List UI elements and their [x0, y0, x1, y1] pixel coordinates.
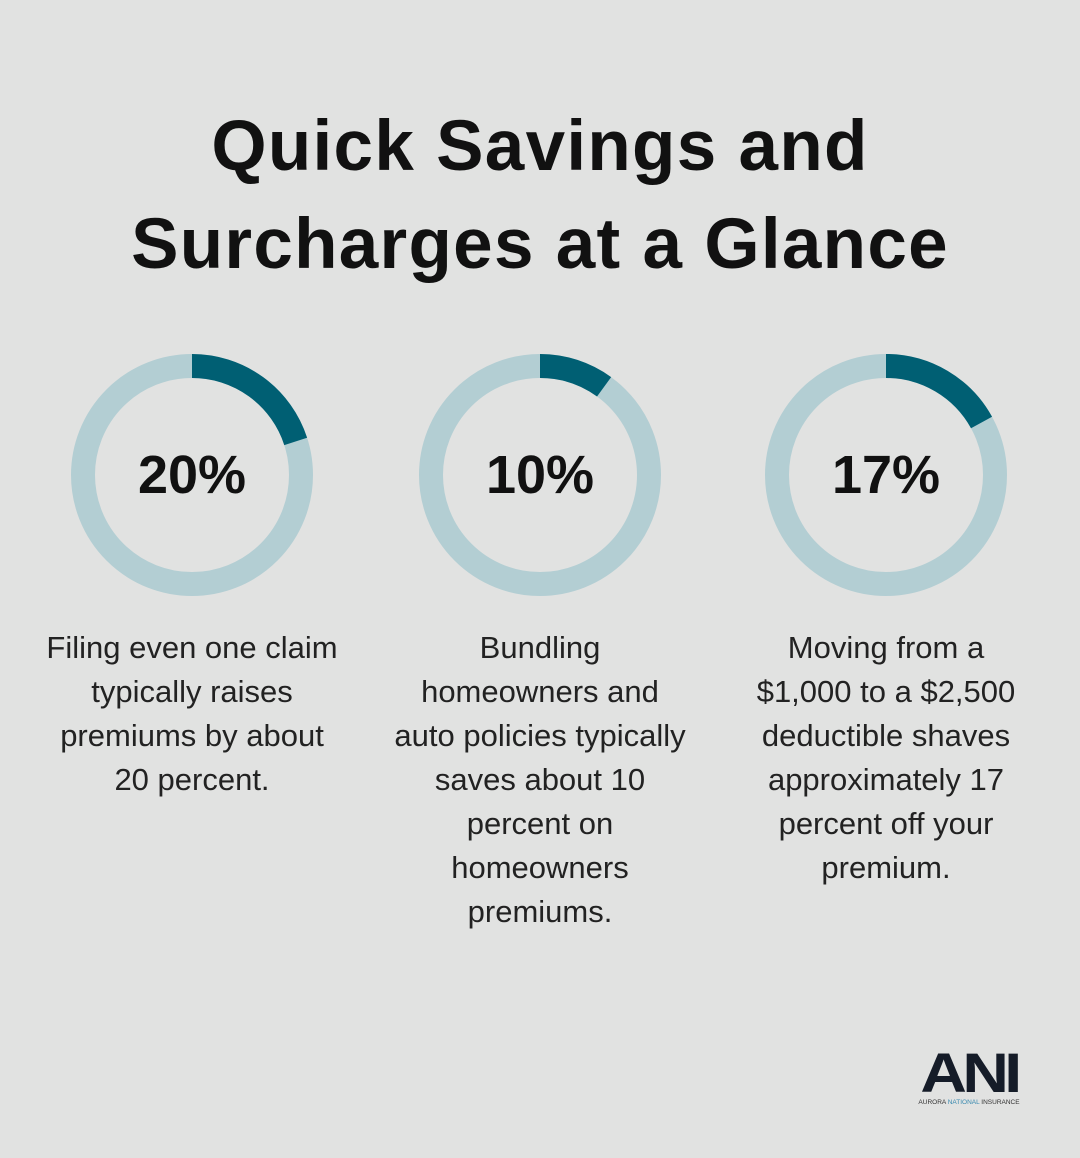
stat: 17%: 17%	[832, 445, 940, 505]
text: bundling: saves about 10	[435, 762, 645, 797]
text: deductible: $1,000 to a $2,500	[757, 674, 1015, 709]
text: claim: premiums by about	[60, 718, 324, 753]
text: deductible: approximately 17	[768, 762, 1004, 797]
donut: 17%	[765, 354, 1007, 596]
title: Surcharges at a Glance	[131, 205, 949, 284]
title	[131, 107, 949, 284]
text: deductible: deductible shaves	[762, 718, 1010, 753]
text: claim: 20 percent.	[114, 762, 270, 797]
text: bundling: Bundling	[480, 630, 600, 665]
stat: 10%: 10%	[486, 445, 594, 505]
text: bundling: percent on	[467, 806, 613, 841]
text: bundling: premiums.	[468, 894, 612, 929]
donut: 20%	[71, 354, 313, 596]
text: deductible: percent off your	[779, 806, 993, 841]
text: deductible: premium.	[821, 850, 951, 885]
text: bundling: auto policies typically	[394, 718, 686, 753]
text: deductible: Moving from a	[788, 630, 984, 665]
text: deductible	[757, 630, 1015, 885]
donut: 10%	[419, 354, 661, 596]
stat: 20%: 20%	[138, 445, 246, 505]
logo: ANI	[920, 1041, 1018, 1104]
text: claim: Filing even one claim	[46, 630, 338, 665]
text: bundling	[394, 630, 686, 929]
logo: AURORA NATIONAL INSURANCE	[918, 1099, 1020, 1106]
text: bundling: homeowners	[451, 850, 629, 885]
title: Quick Savings and	[211, 107, 869, 186]
text: bundling: homeowners and	[421, 674, 659, 709]
text: claim	[46, 630, 338, 797]
text: claim: typically raises	[91, 674, 293, 709]
